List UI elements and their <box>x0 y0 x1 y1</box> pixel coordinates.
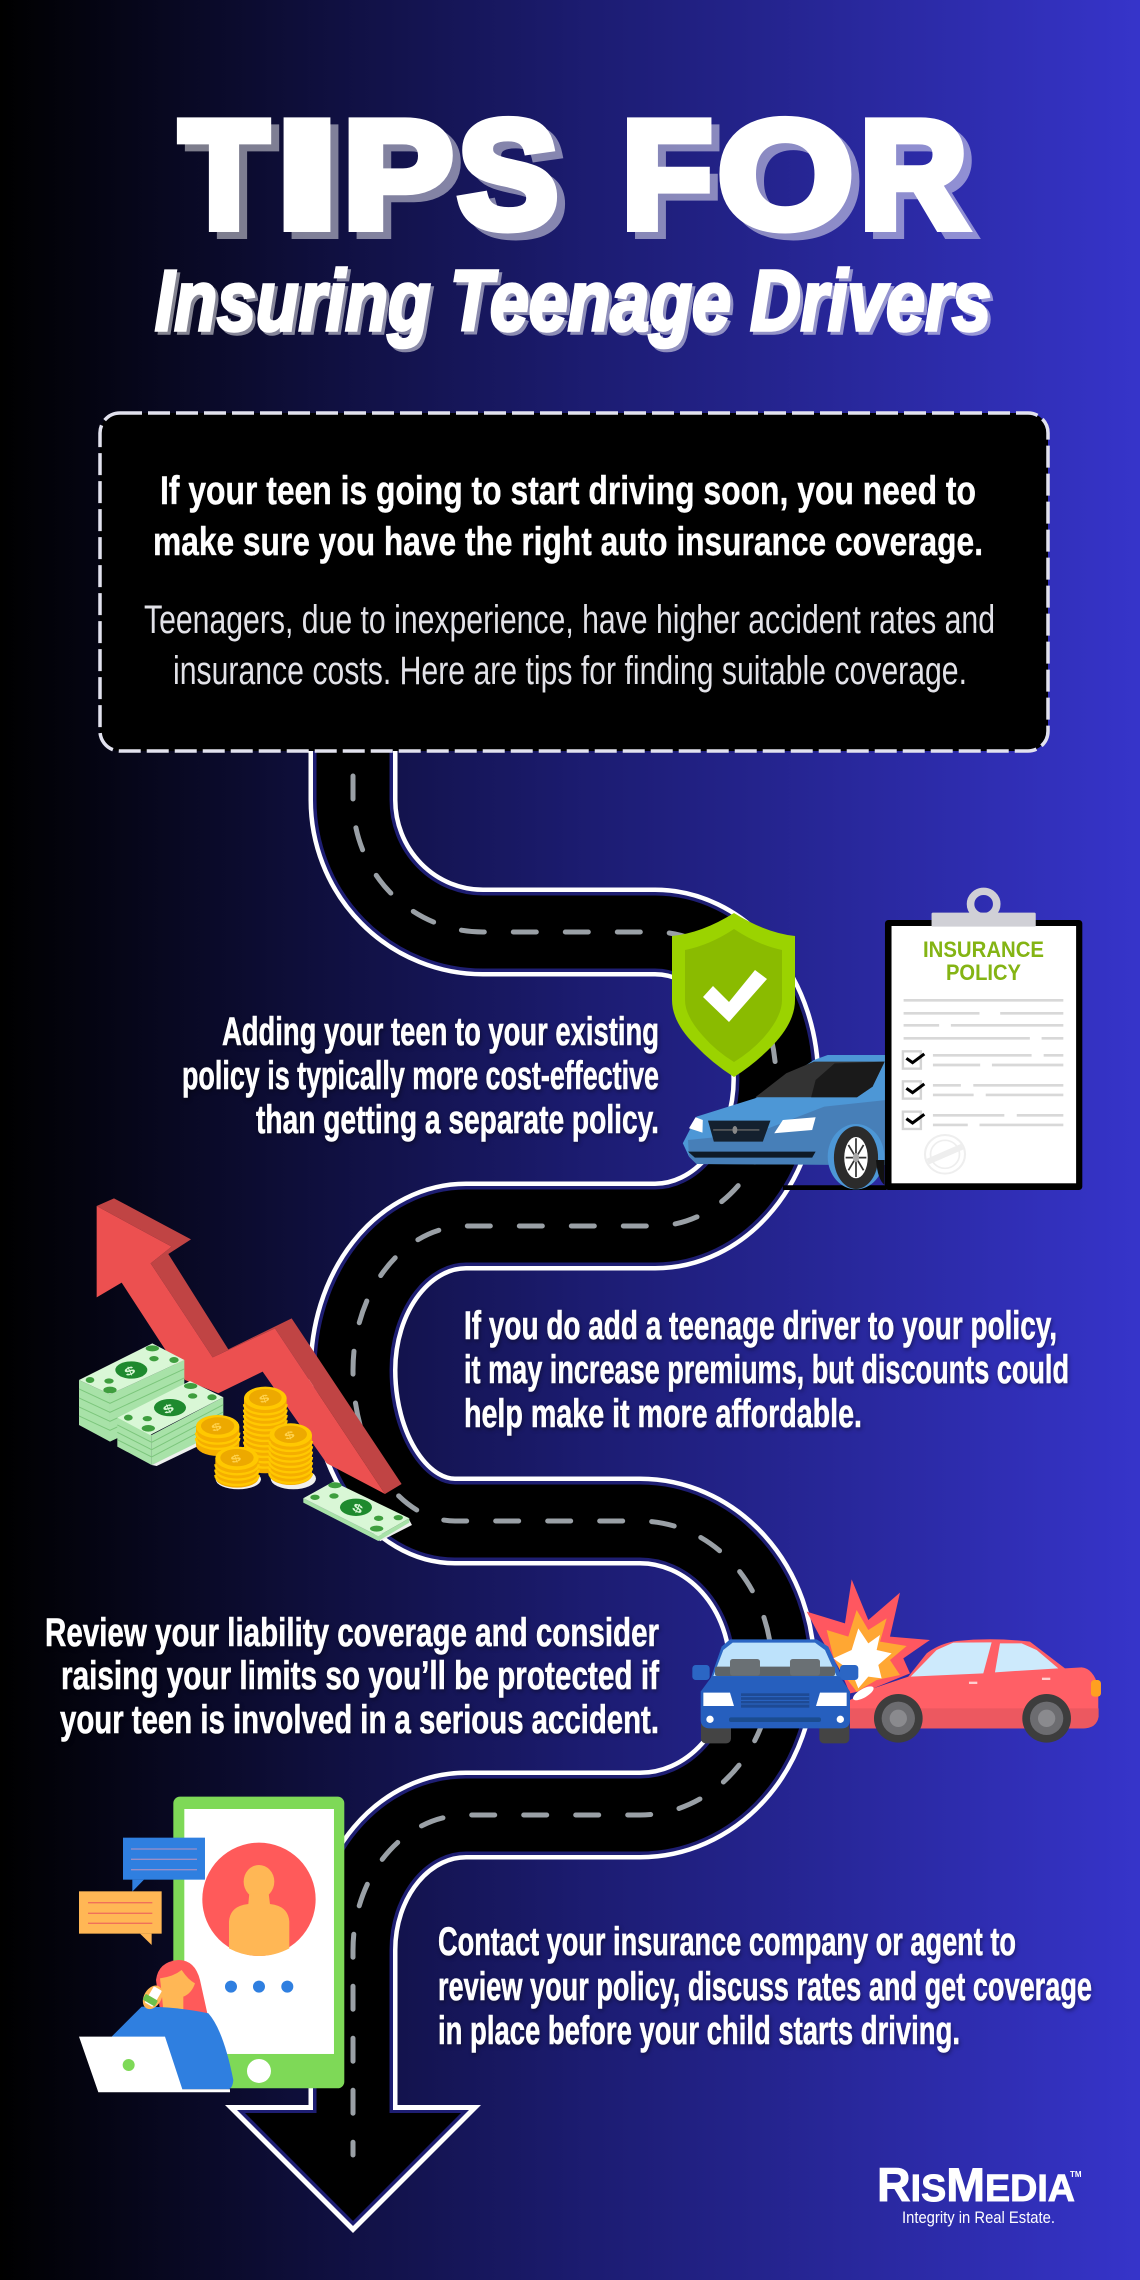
coin stack c: $ <box>283 1429 296 1443</box>
red car <box>850 1639 1101 1743</box>
tip 2 text <box>464 1304 1069 1436</box>
title: P <box>351 97 461 267</box>
policy heading: POLICY <box>946 960 1021 985</box>
title: T <box>180 90 268 260</box>
icon: gold coin stacks <box>196 1387 316 1489</box>
stamp <box>925 1135 965 1174</box>
icon: car crash <box>692 1579 1101 1743</box>
tip 3 text: raising your limits so you’ll be protected if <box>61 1654 660 1698</box>
coin stack b: $ <box>258 1392 271 1406</box>
title: T <box>188 97 276 267</box>
title: R <box>868 97 975 267</box>
tip 2 text: help make it more affordable. <box>464 1392 862 1436</box>
title: F <box>630 97 720 267</box>
cash stack back: $ <box>123 1363 138 1380</box>
title: R <box>860 90 967 260</box>
cash stack front <box>117 1381 223 1466</box>
title: I <box>276 90 338 260</box>
explosion <box>807 1579 930 1693</box>
logo: RisMedia: Integrity in Real Estate. <box>902 2208 1055 2227</box>
checkboxes <box>903 1051 924 1129</box>
logo: RisMedia: RISMEDIA <box>877 2158 1075 2211</box>
coin stack a: $ <box>210 1421 223 1435</box>
tip 3 text: your teen is involved in a serious accident. <box>60 1698 659 1742</box>
icon: stacks of cash <box>79 1343 223 1466</box>
cash stack back <box>79 1343 184 1442</box>
winding road <box>225 745 776 2233</box>
title: O <box>726 97 861 267</box>
woman at laptop <box>79 1960 233 2092</box>
tip 3 text: Review your liability coverage and consider <box>45 1611 659 1655</box>
intro regular text <box>144 598 995 693</box>
tip 1 text: Adding your teen to your existing <box>222 1010 659 1054</box>
icon: insurance policy clipboard <box>885 891 1082 1190</box>
icon: single dollar bill <box>303 1482 412 1541</box>
coin stack d: $ <box>229 1452 243 1466</box>
tip 1 text <box>182 1010 659 1142</box>
policy lines <box>904 1000 1063 1125</box>
intro bold text <box>153 469 983 564</box>
tip 4 text <box>438 1920 1092 2053</box>
chat bubble blue <box>123 1838 205 1892</box>
icon: single dollar bill: $ <box>350 1501 365 1517</box>
title <box>155 90 994 352</box>
title: I <box>284 97 346 267</box>
tip 1 text: than getting a separate policy. <box>256 1098 659 1142</box>
title: S <box>458 90 558 260</box>
panel: intro box <box>100 413 1048 751</box>
title: F <box>622 90 712 260</box>
blue car front <box>692 1639 858 1743</box>
icon: phone with support agent <box>79 1797 344 2092</box>
title: S <box>466 97 566 267</box>
phone <box>173 1797 344 2088</box>
tip 3 text <box>45 1611 660 1742</box>
policy heading <box>923 937 1044 985</box>
title: O <box>718 90 853 260</box>
icon: green shield with check <box>672 913 795 1077</box>
clipboard clip <box>932 891 1036 927</box>
logo: RisMedia: TM <box>1070 2170 1082 2179</box>
policy heading: INSURANCE <box>923 937 1044 962</box>
chat bubble orange <box>79 1891 162 1945</box>
icon: rising red arrow <box>97 1198 402 1494</box>
cash stack front: $ <box>161 1401 176 1417</box>
icon: blue car <box>683 1055 886 1189</box>
title: P <box>343 90 453 260</box>
tip 1 text: policy is typically more cost-effective <box>182 1054 659 1098</box>
